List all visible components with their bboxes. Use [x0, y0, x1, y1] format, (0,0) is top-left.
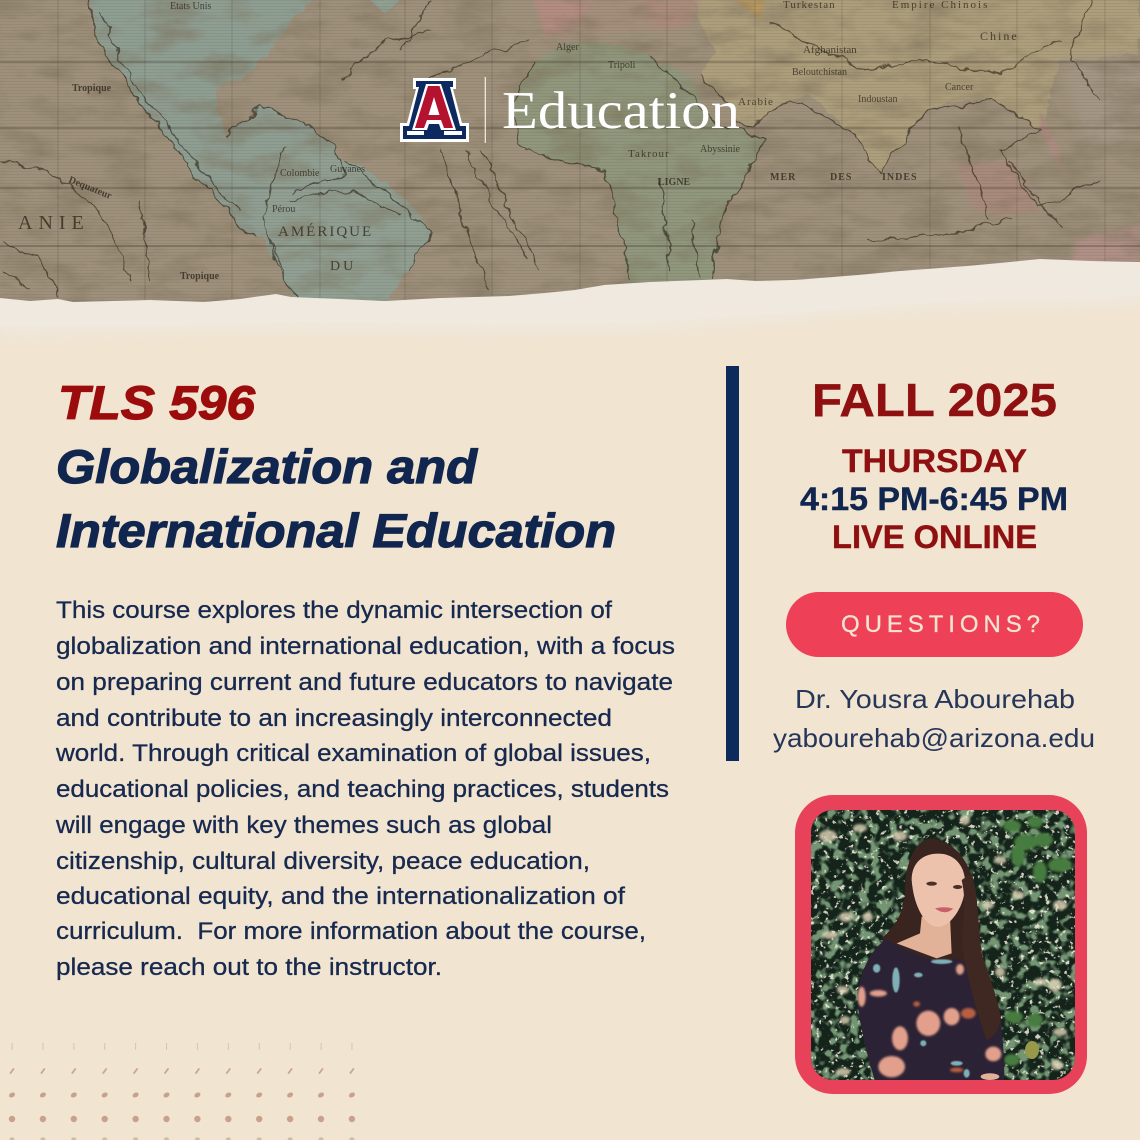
contact details [773, 684, 1095, 753]
land: South-East Asia and Oceania [960, 163, 1034, 212]
logo divider [485, 77, 486, 143]
map place names: MER [770, 172, 796, 183]
flower clusters [819, 815, 1067, 1076]
dress florals [858, 964, 1001, 1077]
map place names: AMÉRIQUE [278, 223, 373, 240]
map place names: Tripoli [608, 60, 636, 71]
map place names: Guyanes [330, 164, 365, 175]
map place names: DES [830, 172, 852, 183]
hair falling over right shoulder [962, 873, 1000, 1040]
map coastlines and routes [0, 0, 1100, 300]
course title: TLS 596 [58, 376, 256, 429]
torn paper edge [0, 259, 1140, 336]
land: South America [262, 160, 432, 301]
neck and chest [897, 917, 952, 958]
questions button: QUESTIONS? [841, 611, 1040, 638]
photo frame [795, 795, 1087, 1094]
course description: globalization and international education, with a focus [56, 633, 675, 660]
map place names: Tropique [72, 83, 112, 94]
hair [882, 838, 1002, 1040]
map place names: Dequateur [67, 175, 114, 202]
land: Europe and accents [530, 0, 690, 38]
map place names: Colombie [280, 168, 320, 179]
course title [56, 376, 616, 557]
schedule [800, 443, 1068, 555]
map place names: Tropique [180, 271, 220, 282]
dress [857, 939, 1004, 1082]
map place names: ANIE [18, 212, 90, 234]
map place names: Afghanistan [803, 44, 857, 56]
map grid lines [0, 0, 1140, 300]
map place names: Arabie [738, 96, 774, 108]
course description: world. Through critical examination of global issues, [55, 740, 651, 767]
hatching and paper grain [0, 0, 1140, 306]
schedule: LIVE ONLINE [832, 519, 1037, 555]
course description: and contribute to an increasingly interconnected [56, 705, 612, 732]
decorative dot pattern [0, 1040, 370, 1140]
logo: University of Arizona block A [400, 78, 469, 142]
questions button [786, 592, 1083, 657]
course description [55, 597, 675, 981]
map place names: LIGNE [658, 177, 691, 188]
course description: This course explores the dynamic intersection of [56, 597, 612, 624]
vertical divider [726, 366, 739, 761]
course title: Globalization and [56, 440, 478, 493]
course description: educational equity, and the internationalization of [56, 883, 625, 910]
schedule: THURSDAY [842, 443, 1027, 479]
contact details: Dr. Yousra Abourehab [795, 684, 1075, 714]
logo wordmark: Education [502, 82, 740, 140]
forearm skin at wrist [981, 1073, 999, 1080]
map place names: Etats Unis [170, 1, 211, 12]
land: North America [87, 0, 345, 240]
map place names: Indoustan [858, 94, 897, 105]
course description: on preparing current and future educators to navigate [56, 669, 673, 696]
semester: FALL 2025 [812, 374, 1057, 426]
course description: will engage with key themes such as global [55, 812, 552, 839]
map place names: Abyssinie [700, 144, 741, 155]
face [912, 854, 965, 927]
contact details: yabourehab@arizona.edu [773, 723, 1095, 753]
course description: citizenship, cultural diversity, peace education, [56, 848, 590, 875]
land: Africa [510, 42, 765, 290]
course description: curriculum. For more information about the course, [56, 918, 646, 945]
map background image [0, 0, 1140, 310]
course description: educational policies, and teaching practices, students [56, 776, 669, 803]
map place names: Beloutchistan [792, 67, 847, 78]
map place names: Chine [980, 29, 1019, 43]
map place names: Alger [556, 42, 579, 53]
map place names: Takrour [628, 148, 670, 160]
map place names: Cancer [945, 82, 974, 93]
instructor photo [811, 810, 1075, 1082]
schedule: 4:15 PM-6:45 PM [800, 481, 1068, 517]
map place names: DU [330, 259, 356, 274]
map place names: INDES [882, 172, 918, 183]
land: Eurasia [690, 0, 1140, 175]
eyes and mouth [926, 882, 937, 886]
map place names [18, 0, 1019, 282]
land: Greenland [370, 0, 400, 14]
course title: International Education [56, 504, 616, 557]
course description: please reach out to the instructor. [56, 954, 442, 981]
map place names: Pérou [272, 204, 295, 215]
bright leaves top right [1003, 816, 1072, 1066]
